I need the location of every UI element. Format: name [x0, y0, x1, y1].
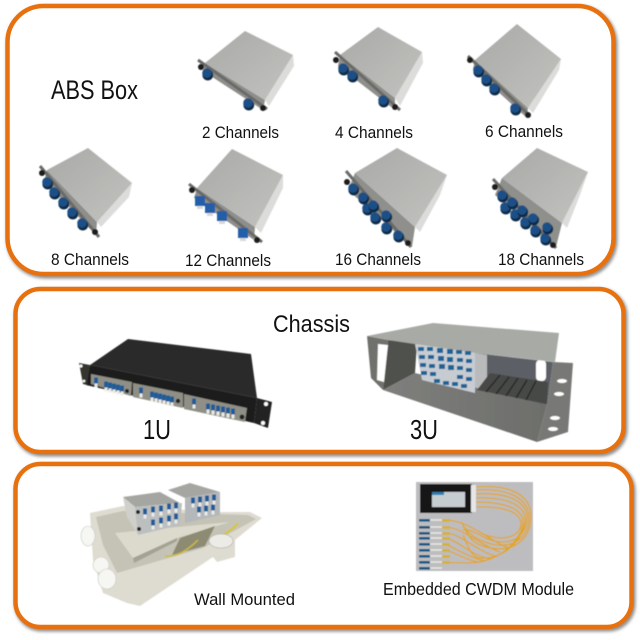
product: 6 channels box [467, 24, 561, 118]
heading: ABS Box: ABS Box [51, 75, 138, 105]
product: 16 channels box [344, 148, 447, 247]
label: 6 channels: 6 Channels [485, 122, 563, 141]
product: 8 channels box [39, 148, 132, 237]
product: wall mounted enclosure [81, 483, 262, 606]
label: 18 channels: 18 Channels [498, 250, 584, 269]
panel: Chassis [16, 289, 625, 454]
product: 2 channels box [198, 31, 294, 111]
product: 4 channels box [333, 27, 423, 110]
product: 12 channels box [189, 149, 283, 243]
label: 4 channels: 4 Channels [335, 123, 413, 142]
label: 3U: 3U [410, 414, 438, 445]
label: 8 channels: 8 Channels [51, 250, 129, 269]
label: embedded CWDM module: Embedded CWDM Module [383, 579, 574, 599]
label: 16 channels: 16 Channels [335, 250, 421, 269]
product: 1U chassis [79, 339, 272, 428]
label: wall mounted: Wall Mounted [194, 590, 295, 609]
heading: Chassis: Chassis [273, 311, 350, 338]
product: 18 channels box [492, 148, 588, 248]
panel: ABS Box [8, 6, 615, 276]
label: 12 channels: 12 Channels [185, 251, 271, 270]
label: 1U: 1U [143, 414, 171, 445]
product: 3U chassis [367, 323, 573, 442]
panel: Wall mounted and embedded [16, 464, 633, 629]
label: 2 channels: 2 Channels [202, 123, 279, 142]
product: embedded CWDM module photo [416, 482, 533, 571]
